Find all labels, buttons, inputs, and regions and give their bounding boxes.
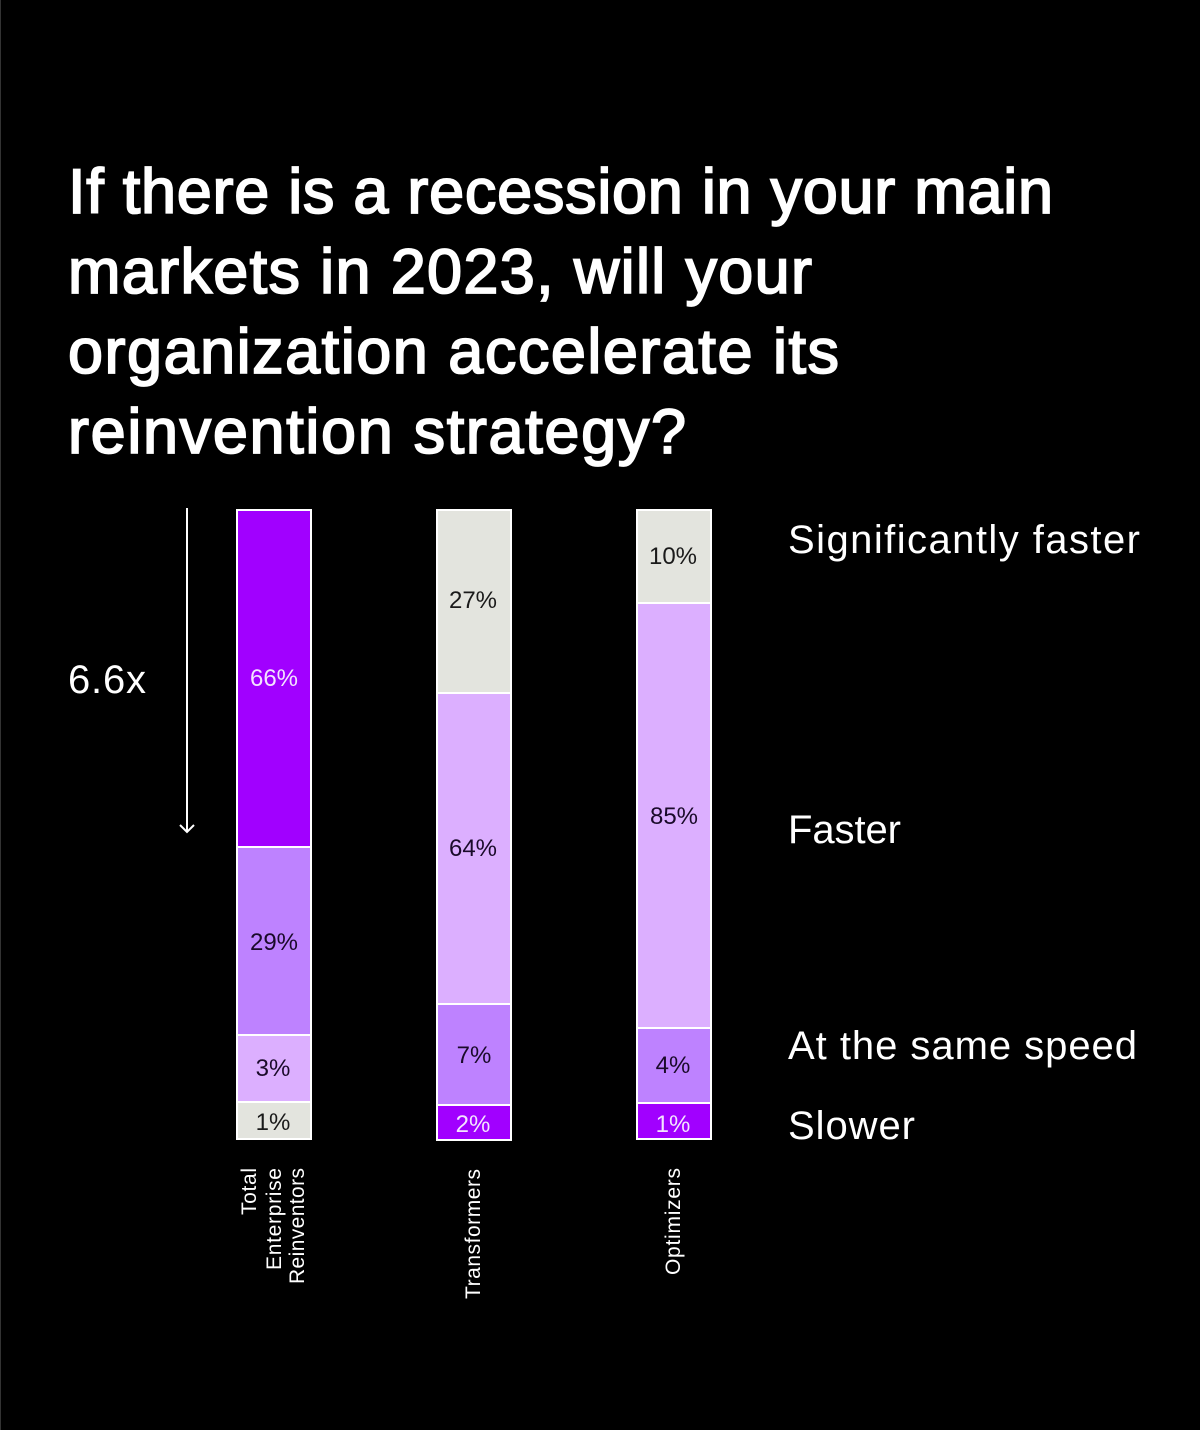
column label: Total Enterprise Reinventors <box>238 1168 309 1284</box>
bar: Optimizers: 10% <box>649 543 697 570</box>
title: reinvention strategy? <box>68 397 686 467</box>
arrow: down from significantly faster <box>180 508 194 832</box>
column label: Total Enterprise Reinventors: Enterprise <box>263 1168 286 1270</box>
bar: Optimizers: 85% <box>650 803 698 830</box>
bar: Total Enterprise Reinventors: 1% <box>256 1109 290 1136</box>
legend labels: Slower <box>788 1104 915 1148</box>
bar: Transformers: 27% <box>449 587 497 614</box>
multiplier label: 6.6x <box>68 658 146 702</box>
bar: Total Enterprise Reinventors: 3% <box>256 1055 290 1082</box>
column label: Total Enterprise Reinventors: Reinventors <box>286 1168 309 1284</box>
column label: Optimizers: Optimizers <box>662 1168 685 1275</box>
title: If there is a recession in your main <box>68 157 1053 227</box>
bar: Total Enterprise Reinventors <box>237 510 311 1139</box>
bar: Transformers <box>437 510 511 1140</box>
bar: Transformers: 7% <box>457 1042 491 1069</box>
legend labels: Faster <box>788 808 901 852</box>
column label: Transformers: Transformers <box>462 1169 485 1299</box>
bar: Optimizers: 4% <box>656 1052 690 1079</box>
title: markets in 2023, will your <box>68 237 812 307</box>
legend labels <box>788 518 1140 1148</box>
bar: Optimizers: 1% <box>656 1111 690 1138</box>
bar: Optimizers <box>637 510 711 1139</box>
legend labels: At the same speed <box>788 1024 1137 1068</box>
bar: Transformers: 2% <box>456 1111 490 1138</box>
legend labels: Significantly faster <box>788 518 1140 562</box>
title <box>68 157 1053 467</box>
bar: Total Enterprise Reinventors: 66% <box>250 665 298 692</box>
bar: Transformers: 64% <box>449 835 497 862</box>
title: organization accelerate its <box>68 317 839 387</box>
bar: Total Enterprise Reinventors: 29% <box>250 929 298 956</box>
column label: Total Enterprise Reinventors: Total <box>238 1168 261 1215</box>
